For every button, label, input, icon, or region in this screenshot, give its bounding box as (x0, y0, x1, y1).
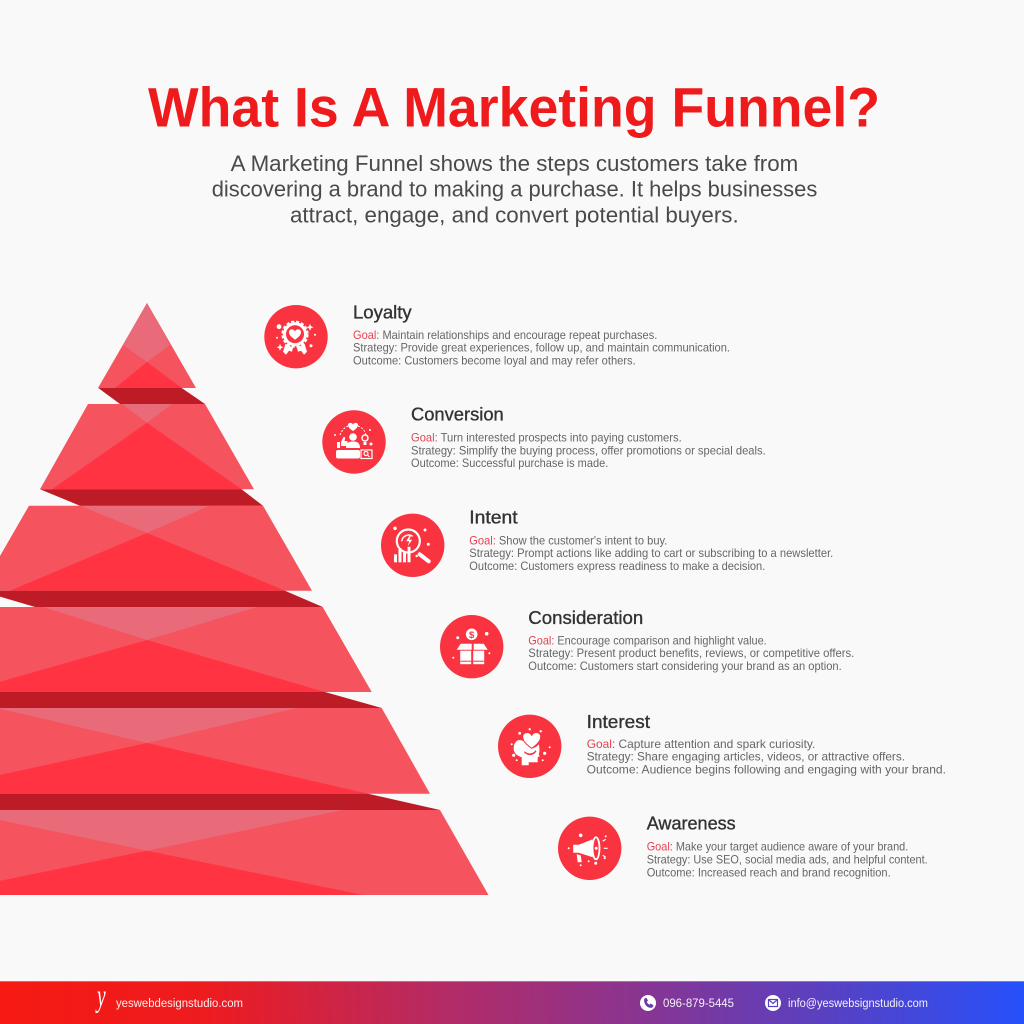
text: Loyalty details: Outcome: Customers become loyal and may refer others. (353, 353, 636, 367)
text: Intent details: Strategy: Prompt actions like adding to cart or subscribing to a newsletter. (469, 546, 833, 560)
subtitle text block: A Marketing Funnel shows the steps customers take from (231, 151, 798, 176)
text: Intent details: Goal: Show the customer's intent to buy. (469, 533, 667, 547)
text: Consideration details: Outcome: Customers start considering your brand as an option. (528, 659, 842, 673)
phone number: 096-879-5445 (663, 998, 734, 1010)
website: yeswebdesignstudio.com (116, 998, 243, 1010)
text: Loyalty details: Strategy: Provide great experiences, follow up, and maintain communication. (353, 341, 730, 355)
text: Consideration details (528, 633, 854, 673)
text: Conversion details: Outcome: Successful purchase is made. (411, 456, 608, 470)
tier 5 shadow band (0, 794, 440, 810)
heading: Loyalty: Loyalty (353, 302, 412, 322)
tier 3 shadow band (0, 591, 323, 607)
footer bar (0, 978, 1024, 1024)
icon: customer with like, idea and search (322, 410, 386, 474)
text: Interest details: Strategy: Share engaging articles, videos, or attractive offers. (587, 750, 905, 764)
text: Consideration details: Strategy: Present product benefits, reviews, or competitive offers. (528, 646, 854, 660)
text: Awareness details: Goal: Make your target audience aware of your brand. (647, 839, 908, 853)
text: Consideration details: Goal: Encourage comparison and highlight value. (528, 633, 767, 647)
panel: Loyalty (264, 302, 730, 368)
title: What Is A Marketing Funnel? (148, 76, 880, 139)
panel: Awareness (558, 814, 928, 880)
text: Intent details (469, 533, 833, 573)
email: info@yeswebsignstudio.com (788, 998, 928, 1010)
icon: mail (765, 995, 781, 1011)
heading: Intent: Intent (469, 507, 518, 527)
heading: Conversion: Conversion (411, 405, 504, 425)
tier 1: loyalty (98, 303, 196, 388)
text: Awareness details: Strategy: Use SEO, social media ads, and helpful content. (647, 852, 928, 866)
text: Interest details (587, 737, 946, 777)
tier 4: consideration (0, 607, 372, 692)
tier 3: intent (0, 506, 312, 591)
funnel pyramid chart (0, 303, 488, 895)
tier 2: conversion (40, 404, 254, 489)
icon: megaphone (558, 817, 621, 880)
subtitle text block: discovering a brand to making a purchase. It helps businesses (212, 177, 817, 202)
logo mark: y (95, 978, 106, 1013)
text: Loyalty details (353, 328, 730, 367)
text: Awareness details (647, 839, 928, 879)
tier 1 shadow band (98, 388, 205, 404)
heading: Consideration: Consideration (528, 608, 643, 628)
panel: Interest (498, 712, 946, 778)
text: Interest details: Goal: Capture attention and spark curiosity. (587, 737, 815, 751)
text: Interest details: Outcome: Audience begins following and engaging with your brand. (587, 763, 946, 777)
tier 5: interest (0, 708, 430, 794)
text: Conversion details: Strategy: Simplify the buying process, offer promotions or special deals. (411, 443, 766, 457)
heading: Awareness: Awareness (647, 814, 736, 834)
text: Loyalty details: Goal: Maintain relationships and encourage repeat purchases. (353, 328, 657, 342)
heading: Interest: Interest (587, 712, 650, 732)
icon: magnifier over bar chart (381, 514, 444, 577)
text: Conversion details (411, 431, 766, 470)
panel: Consideration (440, 608, 854, 678)
icon: phone (640, 995, 656, 1011)
icon: open box with coin: $ (469, 630, 475, 641)
text: Intent details: Outcome: Customers express readiness to make a decision. (469, 559, 765, 573)
tier 6: awareness (0, 810, 488, 895)
subtitle text block: attract, engage, and convert potential buyers. (290, 202, 739, 227)
text: Conversion details: Goal: Turn interested prospects into paying customers. (411, 431, 682, 445)
subtitle text block (212, 151, 817, 227)
panel: Intent (381, 507, 833, 577)
panel: Conversion (322, 405, 766, 474)
icon: open box with coin (440, 615, 503, 678)
tier 4 shadow band (0, 692, 382, 708)
icon: head with heart (498, 715, 561, 778)
tier 2 shadow band (40, 489, 263, 506)
icon: award badge with heart (264, 305, 328, 368)
text: Awareness details: Outcome: Increased reach and brand recognition. (647, 865, 891, 879)
